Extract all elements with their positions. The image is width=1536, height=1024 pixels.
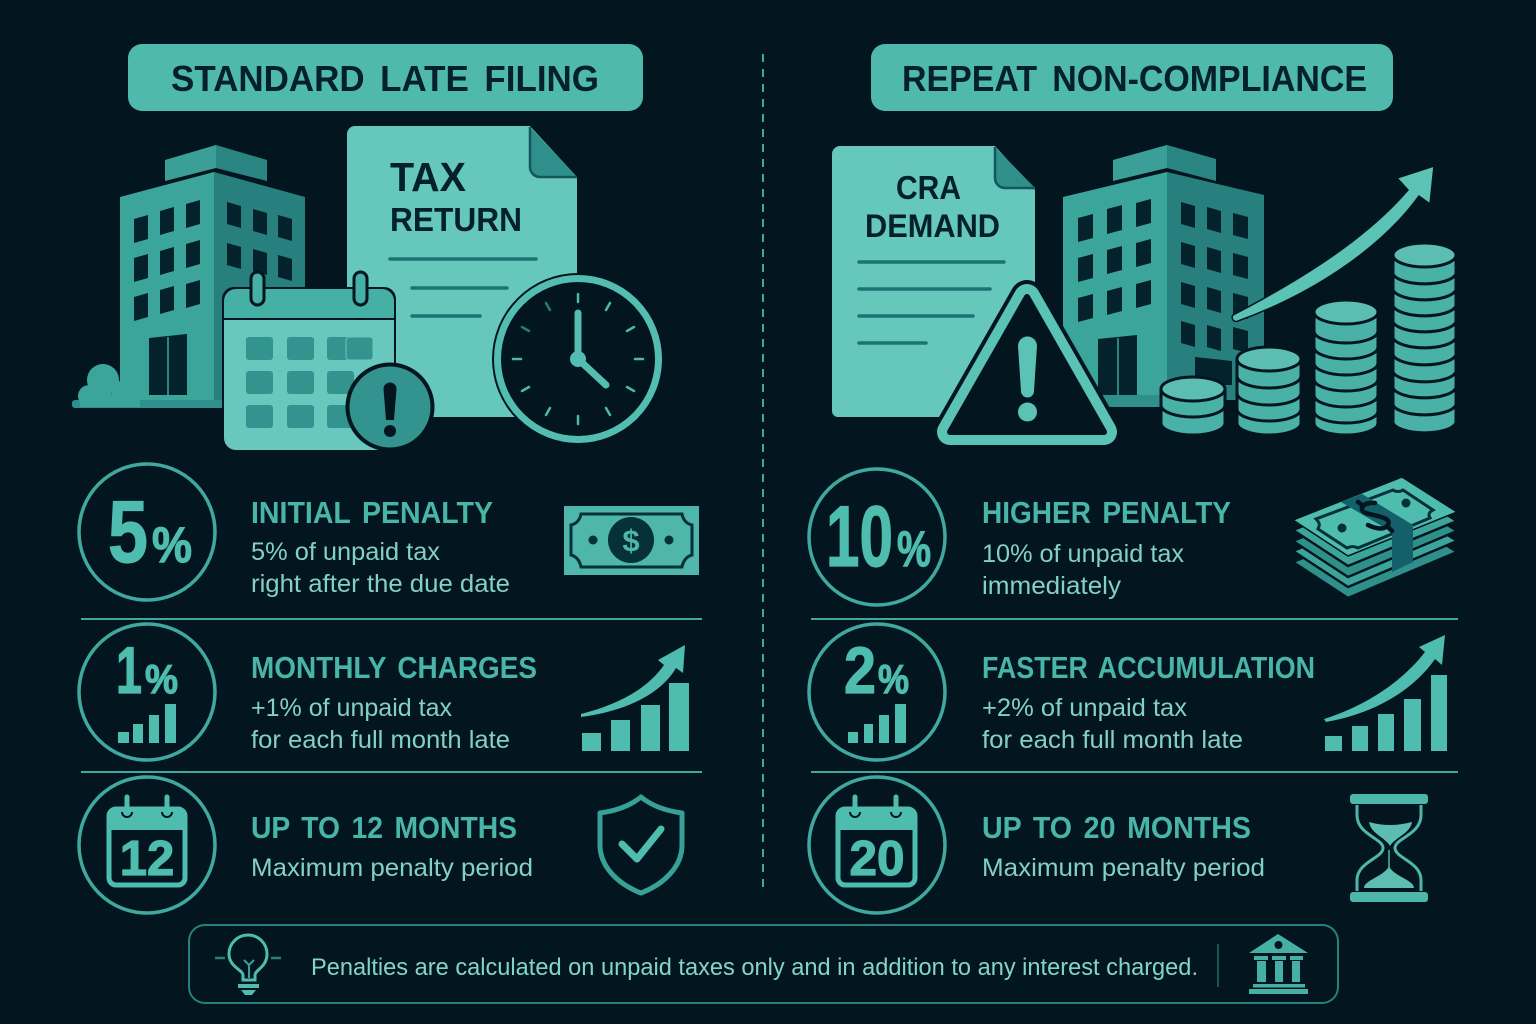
text: up to 12 months: UP TO 12 MONTHS	[251, 810, 517, 845]
icon: office building	[1063, 145, 1264, 407]
icon: stack of cash	[1293, 477, 1457, 598]
text: monthly charges	[251, 650, 537, 754]
heading: standard late filing	[128, 44, 643, 111]
icon: light bulb	[215, 935, 281, 995]
heading: repeat non-compliance: REPEAT NON-COMPLIANCE	[902, 58, 1367, 99]
text: up to 20 months: UP TO 20 MONTHS	[982, 810, 1251, 845]
badge: 2 percent: %	[878, 656, 909, 702]
icon: banknote	[564, 506, 699, 575]
text: up to 20 months: Maximum penalty period	[982, 854, 1265, 882]
text: higher penalty	[982, 495, 1231, 600]
row: higher penalty	[809, 469, 1457, 605]
icon: CRA demand document	[832, 146, 1035, 417]
panel: standard late filing	[72, 44, 702, 913]
arrow: rising penalties	[1232, 166, 1434, 321]
icon: shield with check	[600, 797, 682, 893]
text: monthly charges: for each full month late	[251, 726, 510, 754]
text: monthly charges: +1% of unpaid tax	[251, 694, 452, 722]
badge: 5 percent: 5	[108, 482, 148, 581]
badge: calendar 20	[809, 777, 945, 913]
row: faster accumulation	[809, 624, 1447, 760]
text: initial penalty: INITIAL PENALTY	[251, 495, 493, 530]
icon: clock	[492, 273, 664, 445]
row: monthly charges	[79, 624, 689, 760]
text: faster accumulation: FASTER ACCUMULATION	[982, 650, 1315, 685]
icon: warning triangle	[950, 297, 1104, 432]
panel: repeat non-compliance	[189, 44, 1458, 1003]
row: up to 20 months	[809, 777, 1428, 913]
text: initial penalty	[251, 495, 510, 598]
callout: footer note	[189, 925, 1338, 1003]
icon: hourglass	[1350, 794, 1428, 902]
text: footer note: Penalties are calculated on unpaid taxes only and in addition to any interest charged.	[311, 954, 1198, 981]
badge: 5 percent	[79, 464, 215, 600]
badge: calendar 20: 20	[850, 832, 904, 886]
icon: rising bar chart	[581, 645, 689, 751]
badge: 10 percent: 10	[826, 489, 893, 585]
icon: calendar	[222, 272, 396, 452]
text: initial penalty: 5% of unpaid tax	[251, 538, 440, 566]
badge: 2 percent	[809, 624, 945, 760]
icon: coin stacks	[1161, 243, 1456, 435]
text: higher penalty: 10% of unpaid tax	[982, 540, 1184, 568]
icon: tax return document	[347, 126, 577, 417]
icon: tax return document: RETURN	[390, 201, 522, 238]
text: higher penalty: HIGHER PENALTY	[982, 495, 1231, 530]
row: initial penalty	[79, 464, 699, 600]
text: faster accumulation: for each full month late	[982, 726, 1243, 754]
heading: repeat non-compliance	[871, 44, 1393, 111]
text: higher penalty: immediately	[982, 572, 1122, 600]
text: faster accumulation	[982, 650, 1315, 754]
heading: standard late filing: STANDARD LATE FILING	[171, 58, 599, 99]
text: monthly charges: MONTHLY CHARGES	[251, 650, 537, 685]
badge: calendar 12: 12	[120, 832, 174, 886]
icon: CRA demand document: CRA	[896, 169, 961, 206]
badge: 1 percent: %	[145, 656, 178, 702]
icon: bank building	[1249, 934, 1308, 994]
icon: CRA demand document: DEMAND	[865, 208, 1000, 244]
badge: calendar 12	[79, 777, 215, 913]
badge: 2 percent: 2	[844, 633, 876, 707]
badge: 10 percent	[809, 469, 945, 605]
icon: office building	[72, 145, 305, 408]
badge: 10 percent: %	[897, 521, 931, 577]
icon: alert badge	[348, 364, 432, 450]
badge: 1 percent	[79, 624, 215, 760]
row: up to 12 months	[79, 777, 682, 913]
badge: 5 percent: %	[152, 517, 192, 573]
text: up to 12 months: Maximum penalty period	[251, 854, 533, 882]
text: faster accumulation: +2% of unpaid tax	[982, 694, 1188, 722]
text: up to 12 months	[251, 810, 533, 882]
text: up to 20 months	[982, 810, 1265, 882]
icon: tax return document: TAX	[390, 154, 466, 200]
text: initial penalty: right after the due date	[251, 570, 510, 598]
icon: banknote: $	[622, 523, 640, 558]
badge: 1 percent: 1	[116, 633, 142, 707]
icon: rising bar chart	[1324, 635, 1447, 751]
